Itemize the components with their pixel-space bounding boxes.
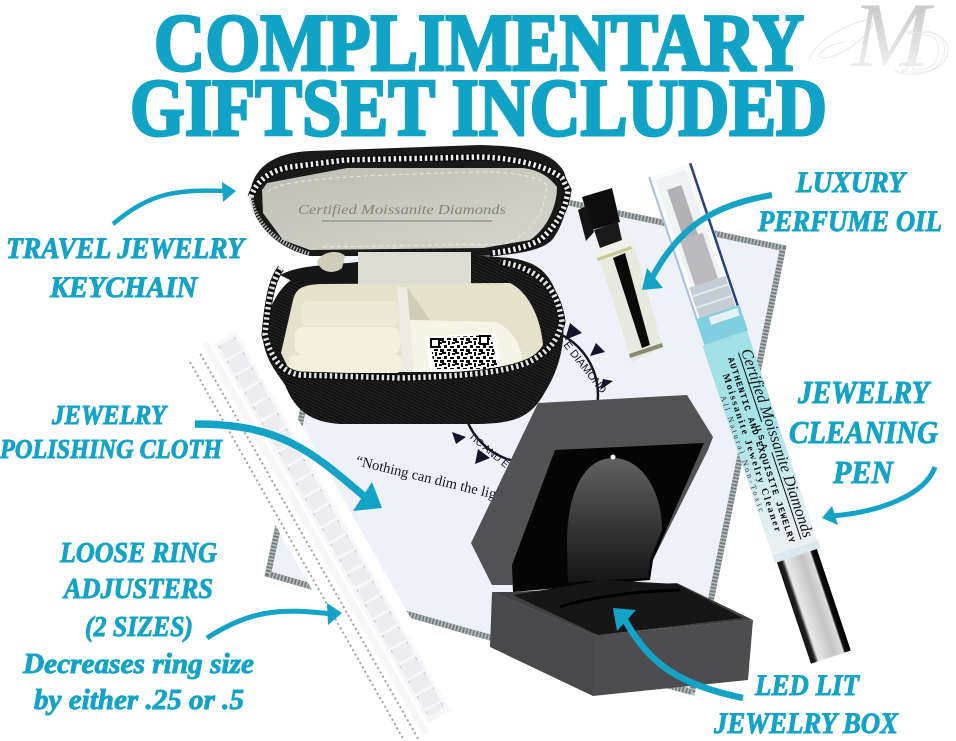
- title: [130, 0, 827, 153]
- label: LED lit jewelry box: LED LIT: [754, 669, 861, 702]
- case tray: [281, 283, 543, 372]
- label: travel jewelry keychain: TRAVEL JEWELRY: [6, 232, 246, 265]
- pen printed text: All Natural Non-Toxic: [719, 394, 766, 513]
- cloth logo seal: E DIAMOND: [561, 339, 609, 396]
- polishing cloth: [268, 165, 783, 692]
- label: LED lit jewelry box: JEWELRY BOX: [713, 707, 899, 740]
- label: jewelry polishing cloth: JEWELRY: [51, 400, 168, 430]
- QR code: [425, 333, 502, 372]
- arrow: ring adjusters: [207, 603, 342, 638]
- label: luxury perfume oil: LUXURY: [795, 166, 907, 199]
- label: jewelry cleaning pen: [789, 374, 938, 490]
- arrow: cleaning pen: [822, 467, 935, 525]
- label: loose ring adjusters: by either .25 or .5: [34, 684, 244, 716]
- cloth logo seal: [452, 323, 613, 471]
- label: luxury perfume oil: [757, 166, 942, 238]
- pen printed text: Moissanite Jewelry Cleaner: [720, 372, 783, 534]
- lit egg interior: [567, 458, 662, 582]
- travel jewelry keychain case: [250, 145, 568, 424]
- case base: [263, 252, 563, 424]
- box lid: [471, 395, 713, 592]
- velvet cushion: [513, 580, 743, 635]
- pen printed text: AUTHENTIC AND EXQUISITE JEWELRY: [725, 356, 796, 545]
- label: LED lit jewelry box: [713, 669, 899, 740]
- LED lit jewelry box: [471, 395, 753, 696]
- zipper pull: [317, 252, 345, 272]
- label: jewelry polishing cloth: [0, 400, 223, 464]
- pen printed text: [707, 347, 816, 551]
- title: GIFTSET INCLUDED: [130, 62, 827, 153]
- perfume oil vial: [578, 188, 663, 362]
- base zipper: [265, 262, 562, 378]
- label: jewelry cleaning pen: CLEANING: [789, 414, 938, 450]
- tray divider: [397, 287, 414, 372]
- box base: [490, 580, 753, 696]
- label: jewelry cleaning pen: PEN: [832, 454, 895, 490]
- label: travel jewelry keychain: KEYCHAIN: [49, 271, 198, 304]
- label: loose ring adjusters: LOOSE RING: [59, 537, 217, 569]
- pen printed text: USA: [753, 424, 769, 451]
- label: travel jewelry keychain: [6, 232, 246, 304]
- arrow: perfume oil: [642, 195, 772, 290]
- case lid: [250, 145, 568, 256]
- arrow: jewelry box: [613, 608, 743, 698]
- label: loose ring adjusters: ADJUSTERS: [62, 573, 213, 605]
- arrow: travel keychain: [113, 182, 236, 224]
- cloth logo seal: TIC AND E: [466, 431, 511, 471]
- label: jewelry cleaning pen: JEWELRY: [797, 374, 931, 410]
- pen body: [702, 331, 818, 559]
- label: loose ring adjusters: Decreases ring size: [22, 648, 254, 680]
- case hinge strap: [358, 252, 471, 284]
- cloth quote: “Nothing can dim the light: [354, 453, 509, 505]
- cleaning pen: [645, 163, 855, 665]
- label: loose ring adjusters: (2 SIZES): [85, 611, 193, 643]
- watermark logo MD: D: [901, 19, 945, 85]
- label: jewelry polishing cloth: POLISHING CLOTH: [0, 434, 223, 464]
- pen printed text: Certified Moissanite Diamonds: [737, 347, 816, 540]
- watermark logo MD: [809, 0, 948, 86]
- pen cap: [648, 163, 748, 345]
- LED light: [610, 454, 616, 460]
- loose ring adjusters: [174, 310, 468, 741]
- pen metal tip: [773, 540, 855, 664]
- ring rolls: [289, 301, 402, 373]
- arrow: polishing cloth: [195, 424, 382, 511]
- label: loose ring adjusters: [22, 537, 254, 716]
- case lid: Certified Moissanite Diamonds: [298, 203, 507, 218]
